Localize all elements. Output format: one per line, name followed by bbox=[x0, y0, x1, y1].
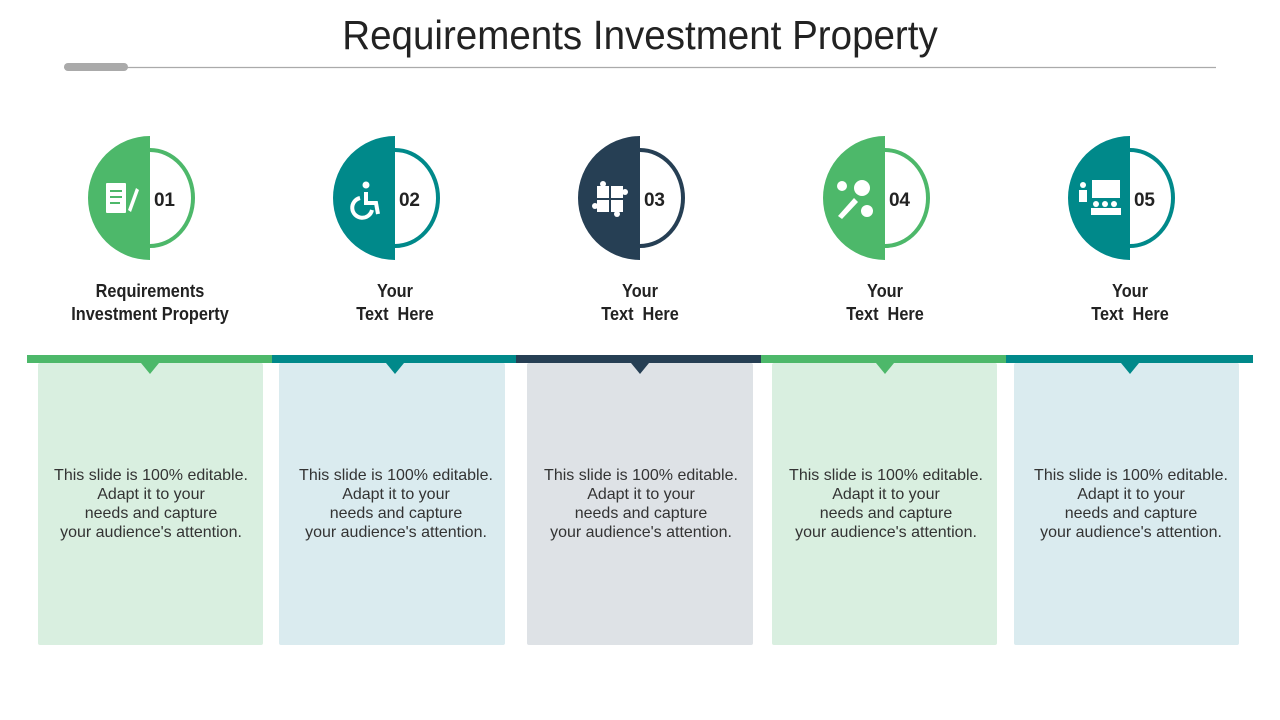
icon: presentation bbox=[1079, 180, 1121, 215]
body text 3 bbox=[544, 467, 738, 541]
body text 2: This slide is 100% editable. bbox=[299, 467, 493, 484]
body text 3: This slide is 100% editable. bbox=[544, 467, 738, 484]
body text 5: your audience's attention. bbox=[1040, 524, 1222, 541]
icon: pencil gear check bbox=[837, 180, 873, 219]
color stripe with pointers bbox=[27, 355, 1253, 374]
label 3: Your bbox=[622, 281, 658, 301]
icon: puzzle bbox=[592, 181, 628, 217]
title: Requirements Investment Property bbox=[342, 12, 938, 58]
label 4: Text Here bbox=[846, 304, 924, 324]
box 4 bbox=[772, 363, 997, 645]
body text 5: needs and capture bbox=[1065, 505, 1197, 522]
step 05 circle bbox=[1068, 136, 1173, 260]
label 2: Text Here bbox=[356, 304, 434, 324]
step 01 circle: 01 bbox=[154, 190, 175, 211]
body text 2: your audience's attention. bbox=[305, 524, 487, 541]
label 5 bbox=[1091, 281, 1169, 324]
label 1: Investment Property bbox=[71, 304, 229, 324]
step 03 circle bbox=[578, 136, 683, 260]
body text 3: needs and capture bbox=[575, 505, 707, 522]
body text 2: Adapt it to your bbox=[342, 486, 450, 503]
box 2 bbox=[279, 363, 505, 645]
body text 4 bbox=[789, 467, 983, 541]
body text 2 bbox=[299, 467, 493, 541]
box 3 bbox=[527, 363, 753, 645]
step 02 circle bbox=[333, 136, 438, 260]
body text 5: Adapt it to your bbox=[1077, 486, 1185, 503]
body text 4: This slide is 100% editable. bbox=[789, 467, 983, 484]
label 3: Text Here bbox=[601, 304, 679, 324]
step 02 circle: 02 bbox=[399, 190, 420, 211]
label 2: Your bbox=[377, 281, 413, 301]
body text 4: your audience's attention. bbox=[795, 524, 977, 541]
body text 1 bbox=[54, 467, 248, 541]
label 5: Your bbox=[1112, 281, 1148, 301]
body text 3: your audience's attention. bbox=[550, 524, 732, 541]
label 1 bbox=[71, 281, 229, 324]
step 03 circle: 03 bbox=[644, 190, 665, 211]
box 1 bbox=[38, 363, 263, 645]
circles icons bbox=[88, 136, 1175, 260]
step 04 circle bbox=[823, 136, 928, 260]
body text 1: needs and capture bbox=[85, 505, 217, 522]
body text 1: your audience's attention. bbox=[60, 524, 242, 541]
label 3 bbox=[601, 281, 679, 324]
body text 1: Adapt it to your bbox=[97, 486, 205, 503]
body text 5: This slide is 100% editable. bbox=[1034, 467, 1228, 484]
body text 4: Adapt it to your bbox=[832, 486, 940, 503]
step 04 circle: 04 bbox=[889, 190, 910, 211]
icon: wheelchair bbox=[352, 182, 378, 218]
box 5 bbox=[1014, 363, 1239, 645]
label 4 bbox=[846, 281, 924, 324]
body text 5 bbox=[1034, 467, 1228, 541]
label 2 bbox=[356, 281, 434, 324]
step 01 circle bbox=[88, 136, 193, 260]
step 05 circle: 05 bbox=[1134, 190, 1155, 211]
body text 3: Adapt it to your bbox=[587, 486, 695, 503]
body text 2: needs and capture bbox=[330, 505, 462, 522]
body text 1: This slide is 100% editable. bbox=[54, 467, 248, 484]
title underline bbox=[64, 63, 1216, 71]
label 4: Your bbox=[867, 281, 903, 301]
label 1: Requirements bbox=[96, 281, 204, 301]
icon: document with pen bbox=[106, 183, 139, 213]
label 5: Text Here bbox=[1091, 304, 1169, 324]
body text 4: needs and capture bbox=[820, 505, 952, 522]
